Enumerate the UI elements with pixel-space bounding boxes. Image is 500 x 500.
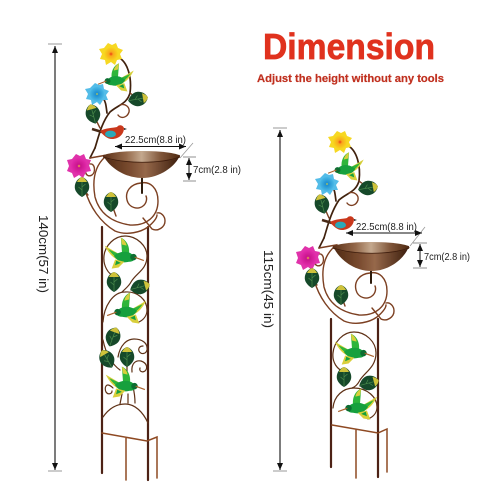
right width dimension — [346, 221, 425, 246]
left frame hummingbirds — [105, 238, 146, 398]
right lower vines — [333, 332, 377, 419]
subtitle: Adjust the height without any tools — [257, 73, 444, 85]
right yellow flower — [328, 131, 352, 153]
left height arrow — [48, 44, 62, 471]
right pink flower — [296, 246, 320, 270]
right blue flower — [315, 173, 339, 195]
left plant: tall stake — [67, 43, 180, 480]
right frame and legs — [331, 319, 387, 478]
left upper vines — [82, 57, 165, 233]
left depth dimension — [183, 157, 241, 181]
left frame and legs — [102, 227, 157, 480]
left height label: 140cm(57 in) — [36, 215, 51, 293]
right depth dimension: 7cm(2.8 in) — [424, 251, 470, 263]
title: Dimension — [263, 26, 435, 67]
left depth dimension: 7cm(2.8 in) — [193, 164, 241, 176]
right upper vines — [311, 145, 394, 323]
left lower vines — [103, 236, 148, 423]
left top hummingbird — [98, 63, 134, 92]
right bowl stem and bowl — [332, 242, 410, 271]
left pink flower — [67, 154, 91, 178]
left bowl stem and bowl — [103, 151, 180, 178]
right height arrow — [273, 128, 287, 471]
left width dimension — [115, 134, 193, 158]
right top hummingbird — [328, 152, 364, 181]
right width dimension: 22.5cm(8.8 in) — [356, 221, 417, 233]
left blue flower — [85, 83, 109, 105]
right frame hummingbirds — [335, 334, 377, 420]
right depth dimension — [413, 243, 470, 268]
right songbird — [322, 216, 357, 230]
right leaves — [305, 179, 381, 393]
right plant: short stake — [296, 131, 410, 478]
left leaves — [75, 90, 152, 371]
left yellow flower — [99, 43, 123, 65]
left width dimension: 22.5cm(8.8 in) — [125, 134, 186, 146]
left songbird — [92, 125, 127, 139]
right height label: 115cm(45 in) — [261, 250, 276, 328]
